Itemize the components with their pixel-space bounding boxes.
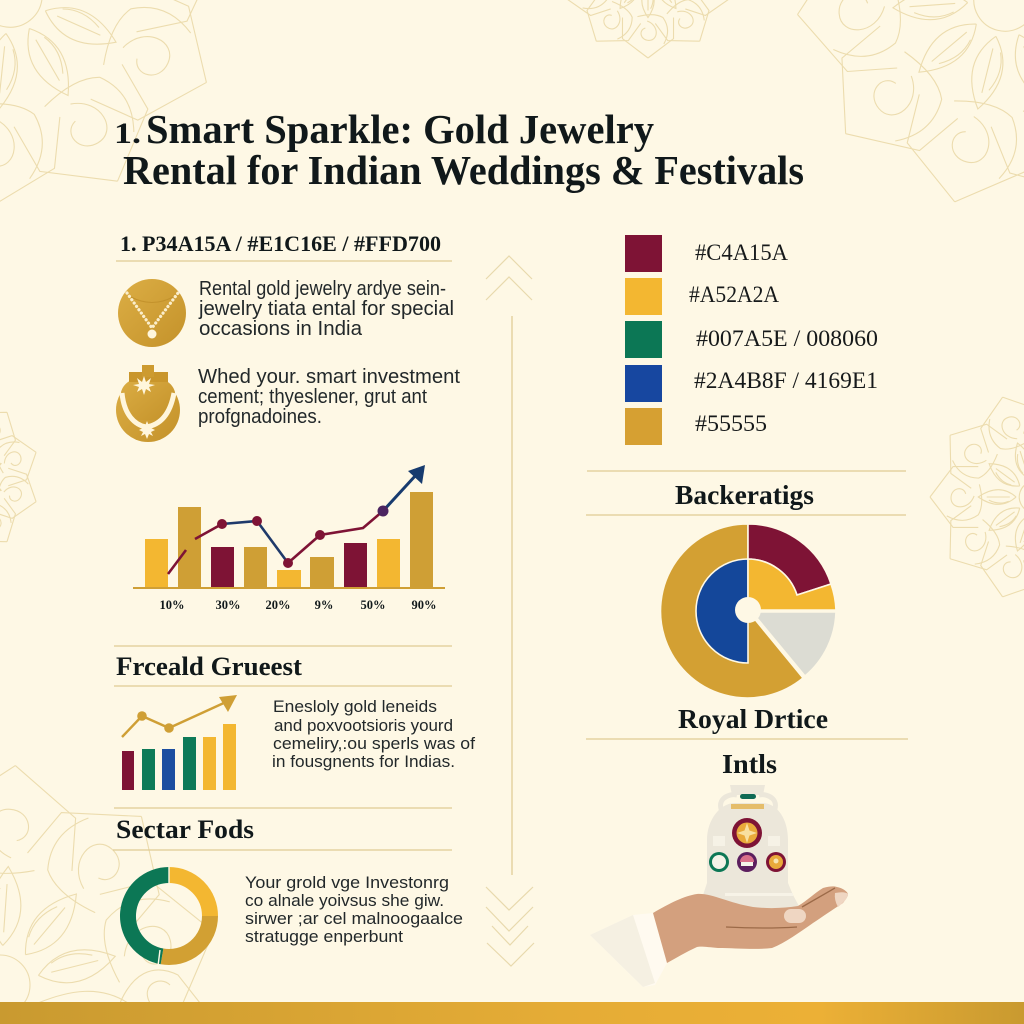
swatch: gold [625,408,767,445]
swatch: green [625,321,878,358]
text block: sector: stratugge enperbunt [245,927,403,946]
chart labels: 10% [160,598,184,612]
swatch: maroon: #C4A15A [695,240,788,265]
icon: gold pendant [116,365,180,442]
text block: rental intro: Rental gold jewelry ardye sein- [199,278,446,300]
swatch: gold: #55555 [695,411,767,436]
bottom gold band [0,1002,1024,1024]
chart labels: 50% [360,598,386,612]
chart labels: 20% [266,598,290,612]
text block: sector [245,873,463,946]
chart labels: 9% [315,598,333,612]
swatch: green: #007A5E / 008060 [696,326,878,351]
icon: gold necklace [118,279,186,347]
title: Smart Sparkle: Gold Jewelry [146,106,654,152]
illustration: hand holding jewellery bell [590,785,848,987]
panel: colour legend [625,235,878,445]
text block: rental intro: occasions in India [199,318,363,340]
text block: growth: Enesloly gold leneids [273,697,437,716]
text block: growth: in fousgnents for Indias. [272,752,455,771]
swatch: maroon [625,235,788,272]
panel: left column top [116,231,460,442]
heading: sector: Sectar Fods [116,815,254,844]
panel: growth section [114,646,475,790]
text block: rental intro: jewelry tiata ental for special [198,298,454,320]
title: Rental for Indian Weddings & Festivals [123,147,804,193]
bar and line chart [133,465,445,612]
icon: open hand [653,886,848,963]
chart: coloured bars with trend arrow [122,695,237,790]
swatch: yellow [625,278,779,315]
text block: sector: sirwer ;ar cel malnoogaalce [245,909,463,928]
centre divider with chevrons [486,256,534,966]
text block: growth [272,697,475,771]
heading: intls: Intls [722,749,777,779]
title [114,106,804,193]
panel: pie section [586,471,908,779]
text block: growth: cemeliry,:ou sperls was of [273,734,475,753]
heading: growth: Frceald Grueest [116,652,302,681]
text block: sector: Your grold vge Investonrg [245,873,449,892]
chart labels: 30% [216,598,240,612]
donut chart [128,866,210,966]
pie chart [661,524,836,698]
text block: sector: co alnale yoivsus she giw. [245,891,444,910]
text block: smart investment [198,366,460,428]
text block: growth: and poxvootsioris yourd [274,716,453,735]
swatch: blue [625,365,878,402]
chart labels: 90% [412,598,436,612]
heading: colour codes: 1. P34A15A / #E1C16E / #FFD700 [120,231,441,256]
text block: rental intro [198,278,454,340]
title: 1. [114,117,141,150]
text block: smart investment: cement; thyeslener, grut ant [198,386,427,408]
panel: sector section [113,808,463,966]
heading: pie: Backeratigs [675,480,814,510]
text block: smart investment: profgnadoines. [198,406,322,428]
heading: royal: Royal Drtice [678,704,828,734]
swatch: blue: #2A4B8F / 4169E1 [694,368,878,393]
text block: smart investment: Whed your. smart investment [198,366,460,388]
icon: jewellery bell [700,785,800,908]
icon: sleeve and cuff [590,913,667,987]
swatch: yellow: #A52A2A [689,282,779,307]
chart labels [160,598,436,612]
